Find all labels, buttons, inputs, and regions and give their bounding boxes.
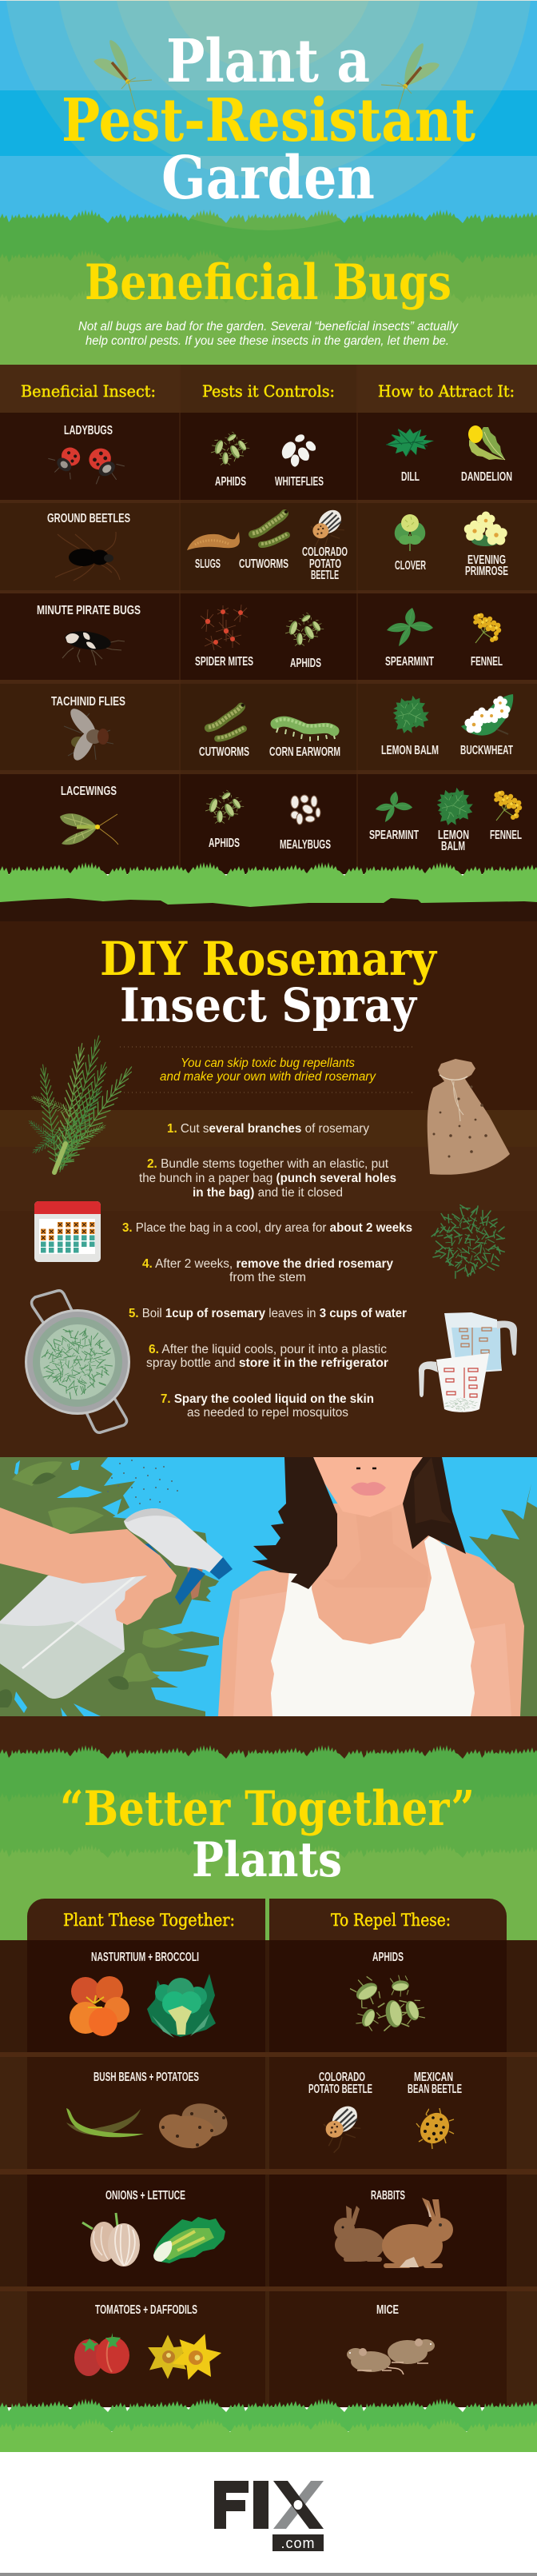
icon: lacewing [60, 813, 118, 845]
icon: rosemary sprigs [26, 1034, 138, 1176]
icon: colorado potato beetle [311, 505, 346, 552]
row: minute pirate bugs [37, 604, 503, 670]
row: tachinid flies: TACHINID FLIES [51, 695, 125, 709]
row: ladybugs: WHITEFLIES [275, 475, 324, 489]
row: nasturtium + broccoli [70, 1951, 428, 2038]
row: tachinid flies: LEMON BALM [381, 744, 439, 757]
row: lacewings [60, 785, 522, 853]
title: Plant a [166, 27, 370, 96]
row: minute pirate bugs: APHIDS [290, 657, 321, 670]
panel: better together table [0, 1899, 537, 2407]
icon: mice [347, 2338, 435, 2374]
row: minute pirate bugs: MINUTE PIRATE BUGS [37, 604, 141, 617]
row: ground beetles: GROUND BEETLES [47, 512, 130, 525]
row: nasturtium + broccoli: NASTURTIUM + BROCCOLI [91, 1951, 199, 1964]
row: minute pirate bugs: FENNEL [471, 655, 503, 669]
row: lacewings: LEMON [438, 829, 469, 842]
row: ground beetles: SLUGS [195, 557, 221, 571]
row: tachinid flies [51, 693, 513, 764]
panel: beneficial bugs table [0, 365, 537, 877]
step 6 [146, 1343, 388, 1370]
step 7 [161, 1392, 374, 1420]
icon: lacewing right [381, 43, 440, 112]
icon: ground beetle [55, 532, 120, 581]
sun rays [4, 0, 533, 230]
icon: cutworms [209, 704, 245, 739]
row: tomatoes + daffodils [74, 2303, 435, 2387]
spray bottle [0, 1508, 233, 1699]
icon: whiteflies [279, 433, 318, 467]
section band: brown gap before plants [0, 1716, 537, 1759]
grass bands: better together [0, 1745, 537, 1940]
callout: intro: and make your own with dried rosemary [160, 1070, 376, 1084]
row: bush beans + potatoes: COLORADO [319, 2071, 365, 2084]
heading: better together plants [60, 1781, 475, 1888]
row: lacewings: LACEWINGS [61, 785, 117, 798]
icon: lemon balm [436, 785, 476, 829]
sky background [0, 0, 537, 240]
row: tachinid flies: CORN EARWORM [269, 745, 340, 759]
woman [218, 1457, 524, 1716]
row: tomatoes + daffodils: MICE [376, 2303, 399, 2317]
icon: lacewing left [93, 40, 152, 110]
icon: lettuce [153, 2217, 225, 2263]
icon: buckwheat [461, 694, 513, 736]
row: ground beetles: COLORADO [302, 545, 348, 559]
step 4 [142, 1257, 393, 1284]
row: ground beetles: PRIMROSE [465, 565, 508, 578]
icon: cutworms [253, 510, 288, 545]
step 2: 2. Bundle stems together with an elastic, put [147, 1157, 389, 1171]
heading: better together plants: Plants [192, 1832, 342, 1888]
heading: beneficial bugs: Beneficial Bugs [85, 254, 451, 311]
table header: How to Attract It: [378, 381, 515, 401]
footer panel [0, 2452, 537, 2573]
row: tomatoes + daffodils: TOMATOES + DAFFODILS [95, 2303, 197, 2317]
row: bush beans + potatoes: BEAN BEETLE [408, 2083, 462, 2096]
row: tachinid flies: CUTWORMS [199, 745, 249, 759]
icon: measuring cups [419, 1312, 517, 1415]
icon: lemon balm [392, 693, 432, 737]
section background [0, 921, 537, 1457]
icon: tachinid fly [64, 705, 113, 764]
row: ground beetles: POTATO [309, 557, 341, 571]
row: minute pirate bugs: SPEARMINT [385, 655, 434, 669]
step 7: as needed to repel mosquitos [187, 1406, 348, 1420]
step 4: from the stem [229, 1271, 306, 1284]
icon: minute pirate bug [62, 629, 125, 665]
heading: DIY rosemary insect spray: DIY Rosemary [100, 932, 438, 986]
row: ground beetles [47, 505, 508, 582]
icon: aphids [209, 430, 250, 465]
step 7: 7. Spary the cooled liquid on the skin [161, 1392, 374, 1406]
step 3: 3. Place the bag in a cool, dry area for about 2 weeks [122, 1221, 412, 1235]
icon: spearmint [376, 792, 412, 822]
row: ladybugs [44, 424, 512, 491]
icon: onions [82, 2213, 140, 2266]
icon: bush beans [66, 2108, 144, 2137]
hand [0, 1508, 177, 1625]
row: onions + lettuce [82, 2189, 453, 2268]
row: lacewings: SPEARMINT [369, 829, 419, 842]
table header: To Repel These: [331, 1911, 451, 1930]
icon: potatoes [159, 2099, 231, 2148]
icon: ladybugs [44, 440, 128, 491]
step 4: 4. After 2 weeks, remove the dried rosemary [142, 1257, 393, 1271]
icon: broccoli [147, 1974, 216, 2038]
table backgrounds [0, 1899, 537, 2407]
panel: DIY rosemary spray [0, 921, 537, 1457]
icon: tomatoes [74, 2333, 129, 2376]
icon: fennel [494, 791, 522, 821]
row: bush beans + potatoes: BUSH BEANS + POTATOES [93, 2071, 199, 2084]
icon: paper bag [428, 1059, 510, 1175]
title [62, 27, 475, 213]
title: Pest-Resistant [62, 86, 475, 155]
icon: slug [187, 532, 240, 550]
icon: mealybugs [291, 795, 320, 825]
row: lacewings: MEALYBUGS [280, 838, 331, 852]
row: lacewings: APHIDS [209, 837, 240, 850]
step 6: 6. After the liquid cools, pour it into a plastic [149, 1343, 387, 1356]
callout: intro [160, 1056, 376, 1084]
step 2: in the bag) and tie it closed [193, 1186, 343, 1200]
row: onions + lettuce: ONIONS + LETTUCE [105, 2189, 185, 2203]
row: ladybugs: LADYBUGS [64, 424, 113, 437]
table header: Beneficial Insect: [21, 381, 156, 401]
icon: dandelion [468, 425, 505, 460]
table header: Pests it Controls: [202, 381, 335, 401]
icon: calendar [34, 1201, 101, 1262]
row: bush beans + potatoes: MEXICAN [414, 2071, 453, 2084]
row: bush beans + potatoes [66, 2071, 462, 2153]
header grass bands [0, 210, 537, 365]
icon: aphids [284, 611, 324, 646]
row: ladybugs: DILL [401, 470, 420, 484]
heading: DIY rosemary insect spray [100, 932, 438, 1032]
intro text: Not all bugs are bad for the garden. Several “beneficial insects” actually [78, 320, 459, 333]
icon: fennel [473, 613, 501, 643]
callout: intro: You can skip toxic bug repellants [181, 1056, 355, 1070]
icon: mexican bean beetle [415, 2107, 455, 2149]
illustration: spraying a woman with repellent [0, 1457, 537, 1716]
icon: clover [392, 514, 428, 551]
row: lacewings: BALM [441, 840, 465, 853]
table backgrounds [0, 365, 537, 877]
icon: evening primrose [464, 511, 507, 546]
heading: better together plants: “Better Together” [60, 1781, 475, 1837]
title: Garden [161, 144, 375, 213]
step 6: spray bottle and store it in the refrigerator [146, 1356, 388, 1370]
row: ground beetles: EVENING [467, 553, 506, 567]
intro text [78, 320, 459, 348]
heading: DIY rosemary insect spray: Insect Spray [120, 978, 418, 1032]
logo: fix.com [214, 2481, 324, 2551]
steps [122, 1122, 412, 1420]
row: onions + lettuce: RABBITS [371, 2189, 405, 2203]
icon: colorado potato beetle [324, 2101, 362, 2153]
icon: daffodils [148, 2326, 225, 2387]
intro text: help control pests. If you see these insects in the garden, let them be. [86, 334, 449, 348]
icon: spearmint [387, 608, 433, 646]
icon: pot of rosemary water [25, 1291, 130, 1432]
row: ground beetles: BEETLE [311, 569, 339, 582]
icon: aphids large [348, 1973, 428, 2032]
icon: nasturtium [70, 1976, 129, 2036]
icon: dried rosemary [423, 1195, 514, 1287]
bottom rule [0, 2573, 537, 2576]
step 2: the bunch in a paper bag (punch several holes [139, 1172, 396, 1185]
row: bush beans + potatoes: POTATO BEETLE [308, 2083, 372, 2096]
left tree [0, 1457, 219, 1716]
spray mist [107, 1460, 178, 1504]
footer grass [0, 2398, 537, 2452]
row: ladybugs: APHIDS [215, 475, 246, 489]
icon: spider mites [201, 605, 248, 650]
icon: aphids [204, 789, 245, 824]
icon: corn earworm [276, 719, 335, 741]
row: ground beetles: CLOVER [395, 559, 426, 573]
grass divider with soil [0, 862, 537, 922]
logo: fix.com: .com [280, 2535, 316, 2551]
icon: dill [386, 429, 434, 457]
table header: Plant These Together: [63, 1911, 235, 1930]
row: nasturtium + broccoli: APHIDS [372, 1951, 404, 1964]
step 1: 1. Cut several branches of rosemary [167, 1122, 369, 1136]
row: ground beetles: CUTWORMS [239, 557, 288, 571]
table header [21, 381, 515, 401]
row: ladybugs: DANDELION [461, 470, 512, 484]
step 2 [139, 1157, 396, 1200]
row: minute pirate bugs: SPIDER MITES [195, 655, 253, 669]
right tree [469, 1484, 537, 1716]
icon: rabbits [334, 2198, 453, 2268]
table header [63, 1911, 451, 1930]
step 5: 5. Boil 1cup of rosemary leaves in 3 cups of water [129, 1307, 407, 1320]
